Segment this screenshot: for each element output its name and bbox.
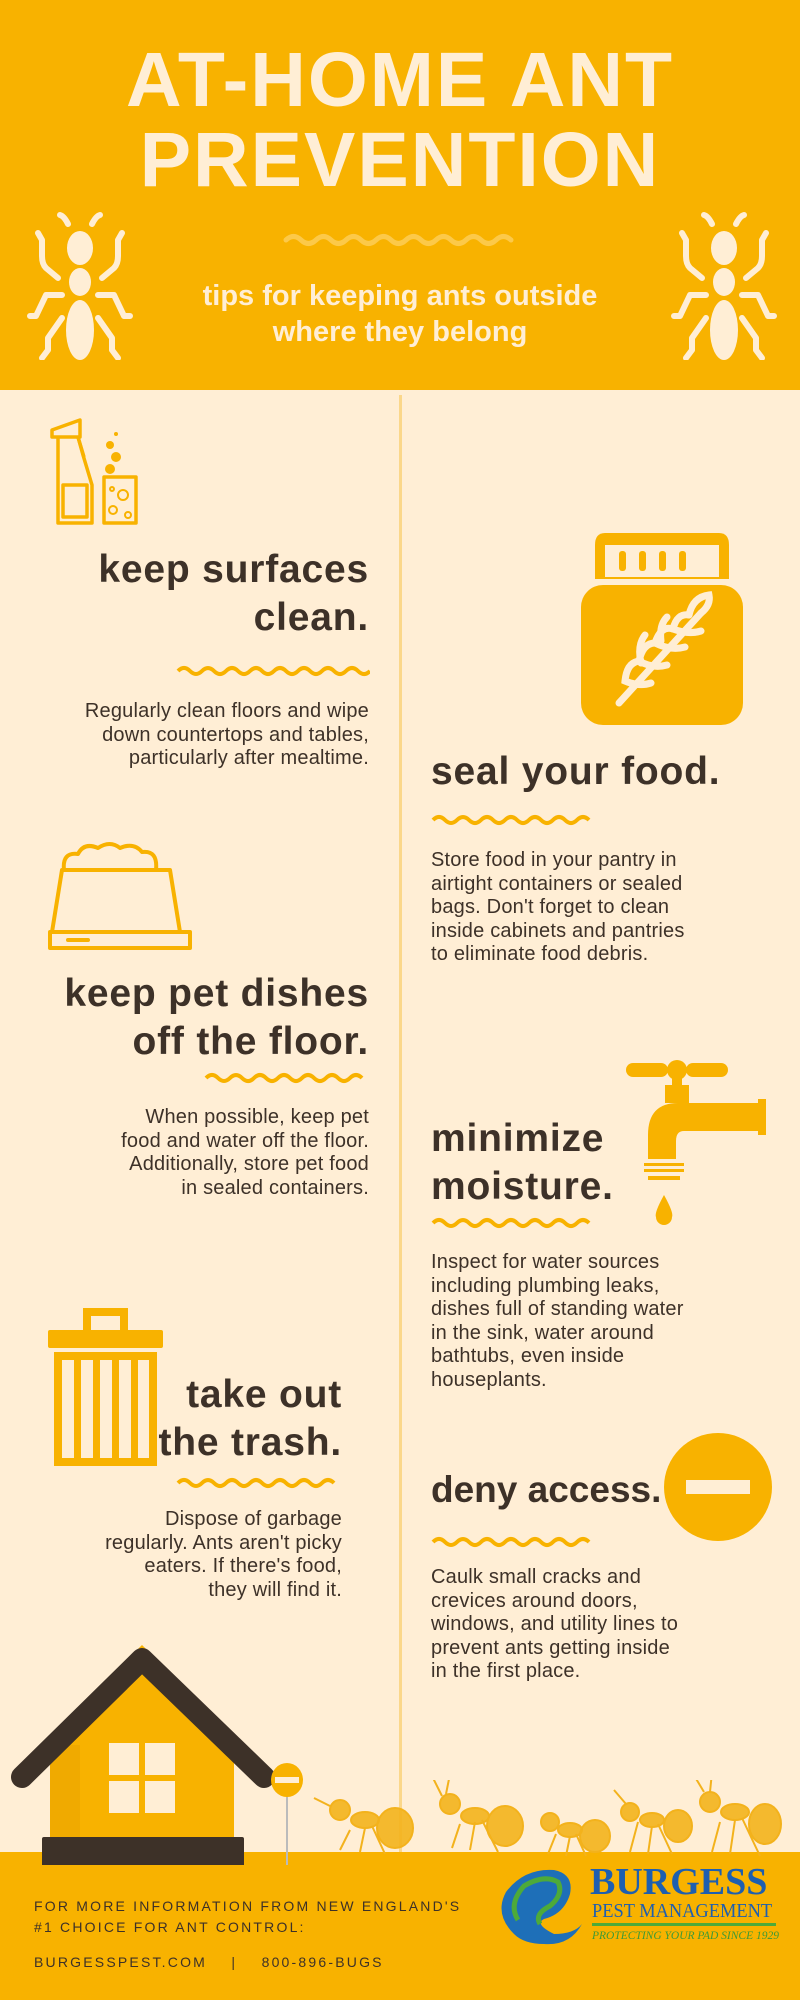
heading: keep pet dishes xyxy=(64,972,369,1015)
icon: frog xyxy=(502,1870,582,1944)
panel: take out the trash xyxy=(48,1308,342,1600)
wave xyxy=(204,1072,364,1084)
text: particularly after mealtime. xyxy=(129,747,369,769)
text xyxy=(431,1566,678,1682)
logo: PEST MANAGEMENT xyxy=(592,1900,772,1922)
header band xyxy=(0,0,800,390)
text: down countertops and tables, xyxy=(102,724,369,746)
icon: no entry xyxy=(664,1433,772,1541)
icon: ant right xyxy=(671,212,777,360)
text: in the first place. xyxy=(431,1660,580,1682)
heading: the trash. xyxy=(158,1421,342,1464)
text: Inspect for water sources xyxy=(431,1251,659,1273)
text: including plumbing leaks, xyxy=(431,1274,659,1296)
heading: seal your food. xyxy=(431,750,720,793)
heading: take out xyxy=(186,1373,342,1416)
text: airtight containers or sealed xyxy=(431,872,682,894)
text: inside cabinets and pantries xyxy=(431,920,685,942)
brand name: BURGESS xyxy=(590,1861,767,1903)
text: houseplants. xyxy=(431,1368,547,1390)
heading: off the floor. xyxy=(132,1020,369,1063)
subtitle xyxy=(202,280,597,348)
subtitle: tips for keeping ants outside xyxy=(203,280,597,312)
icon: ant left xyxy=(27,212,133,360)
text: When possible, keep pet xyxy=(145,1106,369,1128)
icon: trash can xyxy=(48,1308,163,1466)
contact: BURGESSPEST.COM | 800-896-BUGS xyxy=(34,1954,384,1970)
text: bags. Don't forget to clean xyxy=(431,896,669,918)
wave xyxy=(176,1478,336,1488)
header wave xyxy=(284,234,514,246)
text: prevent ants getting inside xyxy=(431,1636,670,1658)
text: bathtubs, even inside xyxy=(431,1345,624,1367)
wave xyxy=(432,1218,590,1228)
text xyxy=(431,849,685,965)
logo: PROTECTING YOUR PAD SINCE 1929 xyxy=(592,1930,779,1942)
text xyxy=(85,700,369,769)
logo xyxy=(502,1861,779,1944)
text: they will find it. xyxy=(208,1578,342,1600)
text: food and water off the floor. xyxy=(121,1130,369,1152)
text: to eliminate food debris. xyxy=(431,943,648,965)
icon: spray and sponge xyxy=(50,418,138,525)
title: PREVENTION xyxy=(140,117,660,203)
text: in sealed containers. xyxy=(181,1176,369,1198)
title: AT-HOME ANT xyxy=(126,37,674,123)
heading: moisture. xyxy=(431,1165,614,1208)
text: windows, and utility lines to xyxy=(431,1613,678,1635)
footer text xyxy=(34,1898,461,1935)
heading: keep surfaces xyxy=(98,548,369,591)
heading xyxy=(431,1117,614,1208)
title xyxy=(126,37,674,203)
text xyxy=(105,1508,342,1600)
heading: minimize xyxy=(431,1117,604,1160)
panel: keep surfaces clean xyxy=(50,418,370,769)
text: Dispose of garbage xyxy=(165,1508,342,1530)
text: dishes full of standing water xyxy=(431,1298,684,1320)
icon: pet bowl xyxy=(48,842,192,950)
heading: deny access. xyxy=(431,1469,661,1510)
panel: deny access xyxy=(431,1433,772,1682)
text: Regularly clean floors and wipe xyxy=(85,700,369,722)
heading: clean. xyxy=(254,596,369,639)
footer text: #1 CHOICE FOR ANT CONTROL: xyxy=(34,1919,306,1935)
icon: food jar xyxy=(581,533,743,725)
text: Additionally, store pet food xyxy=(129,1153,369,1175)
text: Store food in your pantry in xyxy=(431,849,677,871)
wave xyxy=(432,814,590,826)
text xyxy=(121,1106,369,1198)
text xyxy=(431,1251,684,1390)
footer text: FOR MORE INFORMATION FROM NEW ENGLAND'S xyxy=(34,1898,461,1914)
panel: seal your food xyxy=(431,533,743,965)
footer band xyxy=(0,1852,800,2000)
wave xyxy=(432,1536,590,1548)
heading xyxy=(158,1373,342,1464)
panel: keep pet dishes off the floor xyxy=(48,842,369,1198)
text: Caulk small cracks and xyxy=(431,1566,641,1588)
heading xyxy=(64,972,369,1063)
heading xyxy=(98,548,369,639)
text: crevices around doors, xyxy=(431,1590,638,1612)
ants on ground xyxy=(314,1780,782,1856)
house illustration xyxy=(11,1645,303,1865)
subtitle: where they belong xyxy=(273,316,527,348)
text: regularly. Ants aren't picky xyxy=(105,1532,342,1554)
panel: minimize moisture xyxy=(431,1060,766,1390)
wave xyxy=(176,666,370,676)
text: in the sink, water around xyxy=(431,1322,654,1344)
divider xyxy=(399,395,402,1855)
icon: faucet xyxy=(626,1060,766,1225)
text: eaters. If there's food, xyxy=(144,1555,342,1577)
